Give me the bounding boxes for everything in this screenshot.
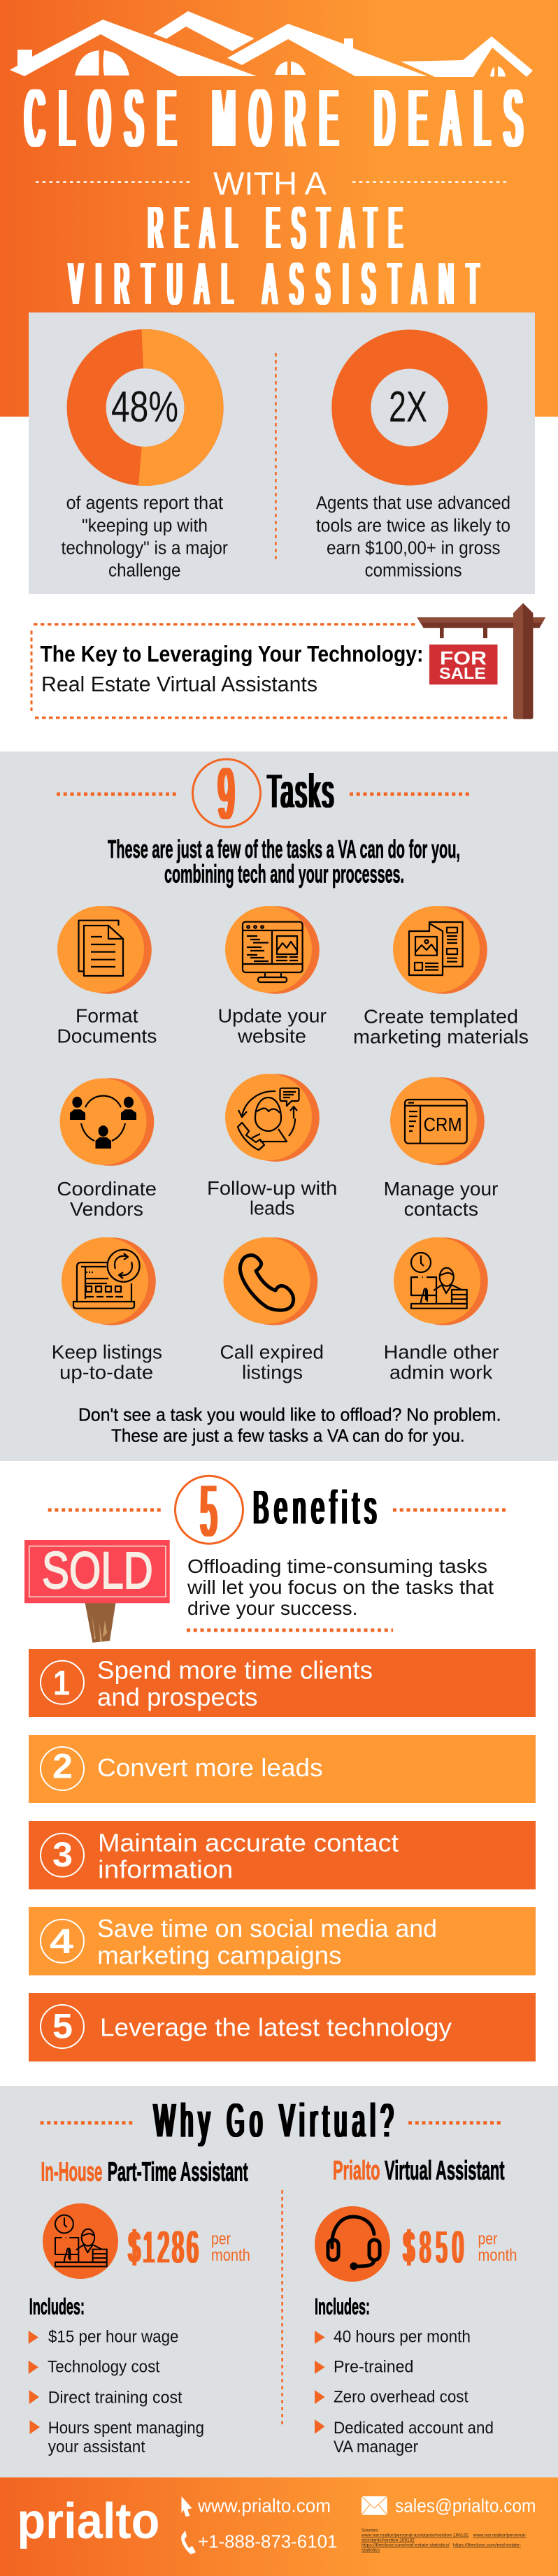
text: sources: www.nar.realtor/personal-assistants#section-166132 (361, 2533, 468, 2538)
list: in-house includes: Hours spent managing (48, 2419, 204, 2438)
heading: in-house (41, 2157, 248, 2187)
list: in-house includes: Direct training cost (48, 2389, 183, 2408)
benefit 3 (29, 1821, 536, 1890)
label: contacts (404, 1198, 478, 1220)
text: sources: assistants#section-166132 (362, 2538, 415, 2543)
label (52, 1341, 162, 1383)
task: keep listings up-to-date (52, 1237, 162, 1383)
panel: why go virtual (0, 2086, 558, 2477)
text: sources: https://theclose.com/real-estate-statistics/ (362, 2543, 450, 2548)
donut chart: 48 percent: 48% (111, 383, 178, 431)
benefit 5: 5 (52, 2007, 73, 2046)
icon: headset agent with chat bubble (225, 1074, 320, 1162)
text: 48 percent description (62, 494, 228, 581)
text: 48 percent description: technology" is a major (62, 539, 228, 559)
heading: in-house: In-House (41, 2157, 102, 2187)
list: in-house includes: Includes: (29, 2294, 85, 2319)
benefit 5 (29, 1993, 536, 2061)
icon: phone (181, 2531, 196, 2554)
list: prialto includes: Pre-trained (334, 2357, 413, 2376)
list: prialto includes: 40 hours per month (334, 2328, 471, 2347)
list: prialto includes: VA manager (334, 2438, 418, 2456)
donut chart: 48 percent (87, 329, 223, 486)
label: Vendors (70, 1198, 143, 1220)
price: $850 per month: per (478, 2230, 498, 2249)
label (218, 1005, 327, 1047)
price: $1286 per month: per (211, 2230, 231, 2249)
text: 2X description: commissions (365, 561, 462, 581)
heading: prialto: Prialto (333, 2156, 380, 2185)
label: leads (250, 1197, 294, 1219)
text: tasks closing note: These are just a few tasks a VA can do for you. (111, 1425, 465, 1446)
icon: house rooflines (10, 11, 533, 77)
price: $1286 per month: $1286 (129, 2222, 201, 2273)
benefit 4: 4 (50, 1922, 73, 1961)
task: format documents (57, 906, 157, 1047)
text: 2X description: Agents that use advanced (316, 494, 510, 513)
phone number: +1-888-873-6101 (198, 2531, 337, 2552)
benefit 1: 1 (53, 1663, 70, 1702)
label (57, 1005, 157, 1047)
text: benefits intro: drive your success. (187, 1597, 358, 1619)
text: benefits intro: will let you focus on the tasks that (187, 1576, 494, 1598)
benefit 1: Spend more time clients (97, 1656, 373, 1685)
callout: key to leveraging technology (31, 603, 545, 719)
benefit 1 (29, 1649, 536, 1717)
icon: phone handset (224, 1237, 317, 1325)
icon: flyers (393, 906, 487, 994)
panel: 9 tasks: Tasks (268, 765, 336, 818)
label: up-to-date (59, 1361, 153, 1383)
benefit 2 (29, 1735, 536, 1803)
label: admin work (389, 1361, 493, 1383)
text: real estate virtual assistants: Real Estate Virtual Assistants (41, 672, 317, 696)
donut chart: 2X (351, 350, 468, 466)
benefit 5: Leverage the latest technology (100, 2013, 452, 2041)
task: call expired listings (220, 1237, 324, 1383)
panel: 9 tasks (0, 751, 558, 1461)
text: sources: statistics (362, 2548, 380, 2553)
text: sources: Sources: (362, 2528, 379, 2533)
panel: technology statistics (29, 312, 535, 594)
icon: for sale sign: FOR (440, 648, 487, 669)
label (220, 1341, 324, 1383)
footer (0, 2477, 558, 2576)
task: coordinate vendors (57, 1078, 157, 1220)
icon: documents (57, 906, 152, 994)
benefit 2: 2 (52, 1746, 73, 1785)
icon: cursor (182, 2496, 192, 2517)
text: tasks closing note: Don't see a task you would like to offload? No problem. (78, 1404, 501, 1425)
column: in-house assistant (29, 2157, 250, 2456)
label: Follow-up with (207, 1177, 337, 1199)
text: benefits intro (187, 1555, 494, 1619)
label: listings (242, 1361, 303, 1383)
icon: for sale sign (417, 603, 545, 719)
icon: monitor (225, 906, 320, 994)
list: prialto includes: Includes: (315, 2294, 370, 2319)
icon: office worker at desk (394, 1237, 488, 1325)
panel: 5 benefits: Benefits (253, 1481, 382, 1534)
benefit 3: Maintain accurate contact (98, 1829, 399, 1857)
text: sources: https://theclose.com/real-estate- (453, 2543, 521, 2548)
task: marketing materials (353, 906, 529, 1048)
text: sources: www.nar.realtor/personal- (473, 2533, 527, 2538)
heading: the key: The Key to Leveraging Your Technology: (41, 642, 424, 667)
donut chart: 2X: 2X (389, 383, 427, 431)
website: www.prialto.com (197, 2495, 331, 2516)
text: sources (361, 2528, 527, 2553)
email: sales@prialto.com (395, 2495, 536, 2516)
label (207, 1177, 337, 1219)
price: $850 per month: $850 (403, 2222, 468, 2273)
text: tasks intro (108, 835, 460, 888)
text: 2X description (316, 494, 510, 581)
benefit 3: information (98, 1855, 233, 1884)
task: manage contacts (384, 1077, 498, 1220)
panel: 5 benefits (24, 1471, 536, 2061)
icon: envelope (362, 2496, 387, 2515)
list: prialto includes (315, 2294, 494, 2456)
label (384, 1178, 498, 1220)
label: Format (76, 1005, 138, 1027)
label: Call expired (220, 1341, 324, 1362)
price: $1286 per month: month (211, 2246, 250, 2265)
icon: CRM window (390, 1077, 485, 1165)
heading: prialto (333, 2156, 505, 2185)
badge: number 9 (193, 754, 260, 835)
icon: for sale sign: SALE (439, 664, 486, 682)
label (57, 1178, 157, 1220)
logo: prialto: prialto (17, 2494, 159, 2549)
subtitle: with a: WITH A (213, 165, 327, 201)
benefit 1: and prospects (97, 1683, 257, 1711)
benefit 4: marketing campaigns (97, 1941, 341, 1969)
label: Manage your (384, 1178, 498, 1200)
header banner (0, 0, 558, 417)
text: 48 percent description: of agents report that (66, 494, 223, 513)
benefit 2: Convert more leads (97, 1753, 323, 1782)
task: handle admin work (384, 1237, 499, 1383)
icon: office worker (43, 2203, 118, 2279)
list: in-house includes: Technology cost (48, 2357, 160, 2376)
label: Update your (218, 1005, 327, 1027)
badge: number 5 (175, 1471, 243, 1552)
icon: CRM window: CRM (424, 1114, 462, 1135)
label: Keep listings (52, 1341, 162, 1362)
list: prialto includes: Zero overhead cost (334, 2388, 468, 2407)
label: Documents (57, 1026, 157, 1047)
badge: number 5: 5 (201, 1471, 217, 1552)
label (353, 1005, 529, 1048)
label: Coordinate (57, 1178, 157, 1200)
benefit 4: Save time on social media and (97, 1914, 437, 1943)
benefit 3: 3 (52, 1835, 73, 1874)
benefit 4 (29, 1907, 536, 1976)
list: prialto includes: Dedicated account and (334, 2419, 494, 2438)
price: $850 per month: month (478, 2246, 517, 2265)
icon: sold sign (24, 1540, 170, 1643)
column: prialto virtual assistant (315, 2156, 517, 2456)
icon: sold sign: SOLD (42, 1541, 153, 1599)
list: in-house includes (29, 2294, 204, 2456)
text: benefits intro: Offloading time-consuming tasks (187, 1555, 487, 1577)
task: follow-up with leads (207, 1074, 337, 1219)
text: 48 percent description: challenge (108, 561, 180, 581)
list: in-house includes: $15 per hour wage (48, 2328, 179, 2347)
text: 2X description: tools are twice as likely to (316, 517, 510, 536)
badge: number 9: 9 (218, 754, 234, 835)
icon: three people network (60, 1078, 154, 1166)
list: in-house includes: your assistant (48, 2438, 145, 2456)
icon: laptop with sync (62, 1237, 156, 1325)
label: Handle other (384, 1341, 499, 1362)
text: tasks closing note (78, 1404, 501, 1446)
heading: in-house: Part-Time Assistant (108, 2157, 248, 2187)
text: 2X description: earn $100,00+ in gross (327, 539, 501, 559)
label: Create templated (364, 1005, 518, 1027)
icon: headset (315, 2206, 390, 2282)
label (384, 1341, 499, 1383)
label: marketing materials (353, 1026, 529, 1048)
task: update website (218, 906, 327, 1047)
text: 48 percent description: "keeping up with (82, 517, 208, 536)
label: website (237, 1026, 306, 1047)
